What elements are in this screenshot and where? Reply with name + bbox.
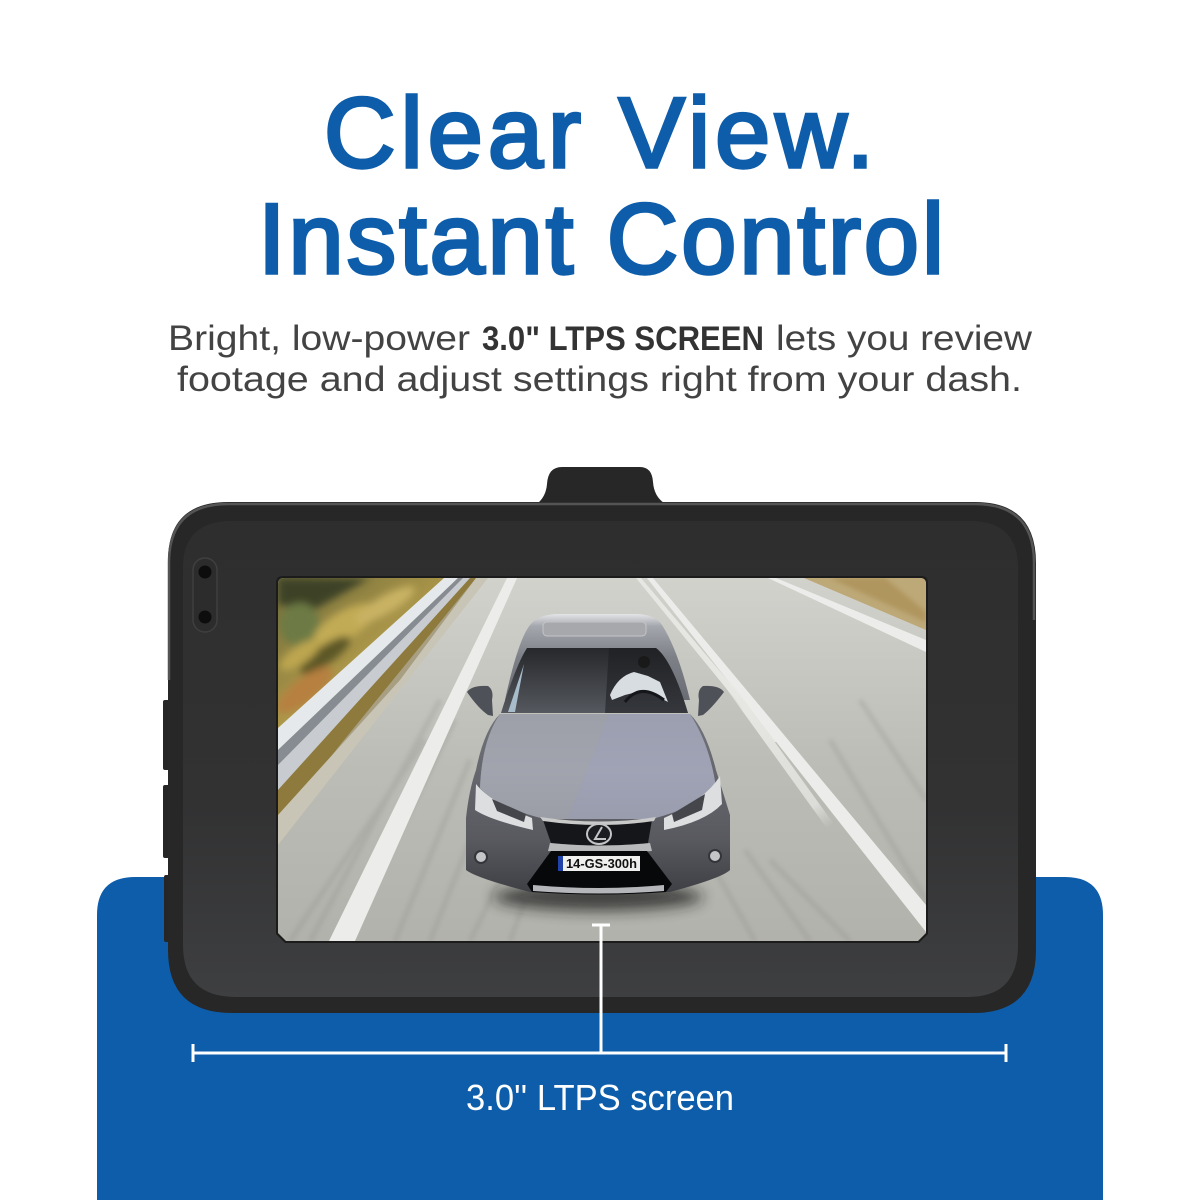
- driver: [610, 672, 668, 702]
- subtitle text block: [168, 319, 1033, 399]
- mirrors: [467, 686, 493, 716]
- car shadow: [493, 883, 703, 911]
- panel: blue base: [97, 877, 1103, 1200]
- motion streaks: [290, 700, 926, 941]
- fog lights: [475, 851, 487, 863]
- license plate: 14-GS-300h: [566, 856, 637, 871]
- road: [278, 578, 926, 941]
- logo: [587, 824, 611, 844]
- headlights: [475, 784, 533, 830]
- subtitle text block: footage and adjust settings right from your dash.: [177, 360, 1022, 399]
- right verge: [804, 578, 926, 630]
- screen edge: [276, 576, 928, 943]
- measurement bracket: [193, 925, 1006, 1062]
- roof: [505, 614, 690, 700]
- mount tab: [538, 467, 664, 503]
- hood: [480, 714, 716, 819]
- guard rail: [278, 578, 488, 845]
- foliage: [278, 578, 458, 728]
- lower grille: [527, 851, 672, 894]
- grille: [543, 820, 652, 846]
- lane lines: [329, 578, 926, 941]
- title: Instant Control: [258, 183, 944, 294]
- hood reflection: [568, 714, 716, 819]
- grille chrome: [540, 817, 656, 825]
- camera body: [168, 502, 1036, 1013]
- title: Clear View.: [324, 77, 874, 188]
- windshield: [501, 648, 688, 713]
- speaker holes: [193, 558, 217, 632]
- screen image: road and car: [271, 578, 926, 941]
- dash cam device: [163, 467, 1036, 1013]
- body lower: [466, 714, 730, 892]
- sunroof: [543, 622, 646, 636]
- title: [258, 77, 944, 294]
- subtitle text block: lets you review: [776, 319, 1033, 358]
- front bezel: [183, 521, 1018, 997]
- car: [466, 614, 730, 894]
- measurement label: 3.0'' LTPS screen: [466, 1077, 734, 1118]
- subtitle text block: Bright, low-power: [168, 319, 470, 358]
- subtitle text block: 3.0" LTPS SCREEN: [482, 320, 764, 358]
- side buttons: [163, 700, 171, 942]
